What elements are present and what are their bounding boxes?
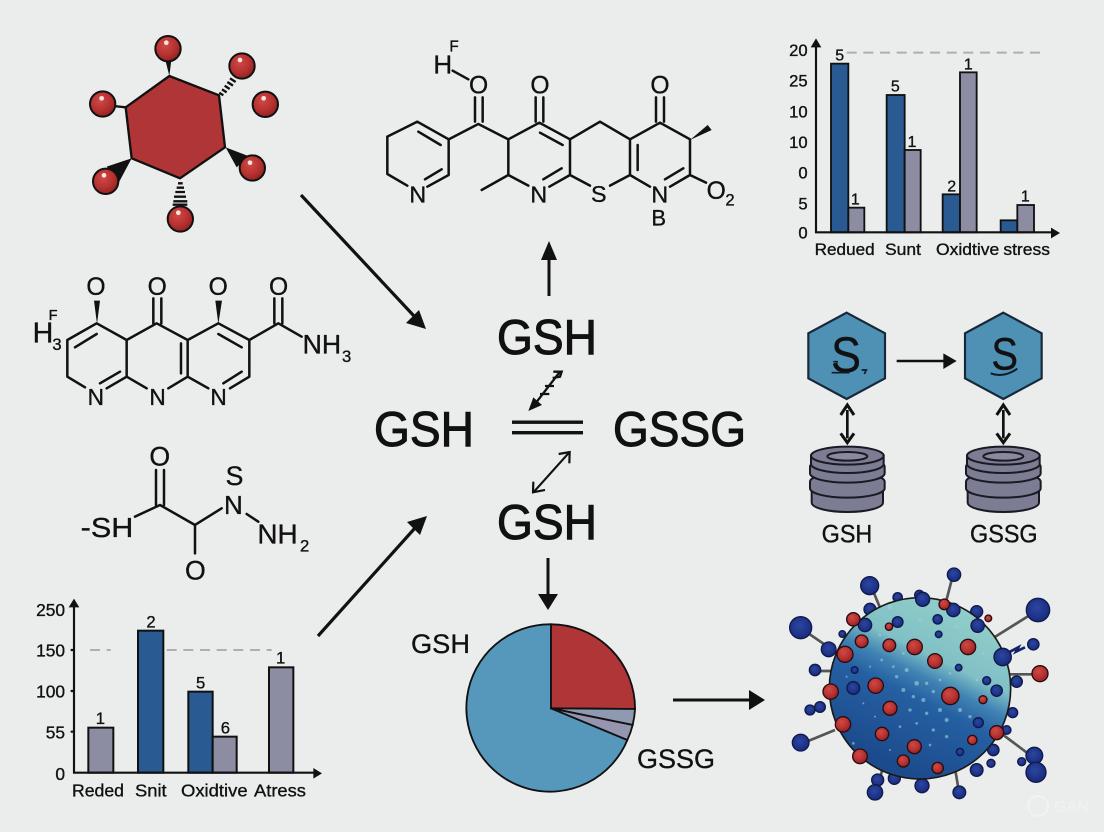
blue balls on sphere and rim	[790, 568, 1050, 800]
linker squiggle	[1010, 647, 1025, 652]
bar chart: top right	[789, 38, 1060, 259]
atom labels: -SH	[81, 512, 133, 543]
hexagon: left S: S	[831, 327, 861, 383]
arrow: hexagon to hexagon	[897, 353, 957, 369]
bonds and wedges	[107, 60, 248, 205]
bar value labels: 1	[96, 709, 105, 728]
arrow: left double	[841, 405, 854, 443]
atom labels: O	[650, 73, 670, 100]
bar value labels: 5	[196, 673, 205, 692]
atom labels: 3	[342, 347, 351, 366]
x axis labels: Reded	[72, 781, 124, 801]
hexagon: left S	[808, 313, 885, 399]
x axis labels: stress	[1003, 240, 1050, 259]
molecule: left fused rings	[33, 274, 351, 410]
hexagon: right S: S	[991, 328, 1018, 379]
bar value labels: 1	[964, 56, 973, 73]
bar value labels: 2	[146, 613, 156, 632]
arrow: pie to sphere	[673, 690, 765, 710]
slice: gray upper	[551, 708, 635, 725]
atom labels: 3	[52, 335, 62, 354]
slice: red	[551, 624, 635, 709]
watermark	[1028, 796, 1089, 816]
atom labels: O	[149, 441, 170, 471]
center label: GSH left: GSH	[374, 403, 474, 457]
x axis labels: Redued	[815, 240, 875, 259]
red balls	[823, 599, 1048, 774]
atom labels	[409, 39, 735, 230]
y axis labels: 0	[798, 224, 808, 243]
atom labels: 2	[300, 537, 309, 556]
atom labels: O	[185, 555, 206, 585]
arrow: double headed thin	[533, 452, 570, 492]
bonds	[387, 71, 706, 190]
x axis labels: Atress	[254, 781, 306, 801]
atom labels	[81, 441, 309, 585]
axes	[69, 599, 322, 779]
y axis labels: 0	[798, 164, 808, 183]
bars	[88, 631, 293, 773]
atom labels: F	[449, 39, 459, 56]
axes	[811, 38, 1060, 238]
watermark: GAN	[1054, 799, 1089, 816]
bar value labels: 5	[835, 48, 844, 65]
molecule: SH amide fragment	[81, 441, 309, 585]
x axis labels	[72, 781, 306, 801]
bar value labels: 1	[908, 134, 917, 151]
stack: right	[966, 447, 1041, 512]
pie label: GSSG: GSSG	[637, 744, 715, 774]
atom labels: NH	[303, 329, 341, 359]
y axis labels: 10	[789, 133, 808, 152]
bar value labels: 2	[947, 179, 956, 196]
atom labels: NH	[257, 518, 298, 549]
slice: gray lower	[551, 708, 633, 740]
label: GSH: GSH	[822, 521, 872, 548]
atom labels: O	[530, 73, 550, 100]
x axis labels: Snit	[135, 781, 167, 801]
bar chart: bottom left	[36, 599, 322, 801]
molecule: red hexagon with atoms	[90, 36, 278, 232]
bars	[831, 64, 1034, 232]
arrow: bar chart to center	[318, 516, 427, 636]
pie label: GSH: GSH	[411, 629, 470, 659]
arrow: hexagon to center	[301, 195, 426, 329]
hexagon pathway with stacks	[808, 313, 1042, 548]
y axis labels: 150	[36, 641, 65, 661]
x axis labels: Oxidtive	[181, 781, 248, 801]
bar value labels: 1	[1021, 189, 1030, 206]
slice: blue GSH	[466, 624, 627, 792]
threshold line	[90, 647, 272, 653]
atom labels: O	[86, 274, 106, 301]
y axis labels: 20	[789, 41, 808, 60]
arrow: small barbed arrow	[528, 372, 562, 411]
label: GSSG: GSSG	[970, 521, 1038, 548]
atom labels: O	[209, 274, 228, 301]
y axis labels: 55	[46, 722, 65, 742]
atom labels: N	[530, 182, 547, 208]
y axis labels	[789, 41, 808, 243]
x axis labels	[815, 240, 1050, 259]
outer balls behind sphere	[821, 590, 1022, 793]
y axis labels: 250	[36, 600, 65, 620]
atom labels: F	[49, 308, 58, 324]
y axis labels: 0	[55, 764, 65, 784]
wedge bond	[690, 125, 712, 140]
atom labels: N	[88, 384, 104, 410]
atom labels: O	[469, 73, 488, 100]
arrow: center down to pie	[538, 558, 558, 610]
wedge bonds	[94, 301, 222, 324]
atom labels: O	[269, 274, 288, 301]
atom labels: N	[224, 490, 243, 520]
molecule: top center structure	[387, 39, 735, 230]
bar value labels: 6	[221, 718, 230, 737]
bar value labels: 1	[851, 191, 860, 208]
atom labels: O	[707, 178, 726, 205]
atom labels: N	[210, 384, 227, 410]
center label: GSH top: GSH	[497, 311, 597, 365]
atom labels: N	[651, 182, 668, 208]
arrow: right double	[997, 405, 1010, 443]
equilibrium bars	[512, 420, 583, 434]
sphere: nanoparticle	[790, 568, 1050, 800]
bar value labels: 5	[891, 79, 900, 96]
bonds	[135, 470, 258, 553]
atom labels: B	[651, 205, 666, 230]
speckles	[846, 604, 985, 751]
bar value labels	[96, 613, 285, 737]
arrow: center up to molecule	[541, 241, 557, 296]
atoms	[90, 36, 278, 232]
atom labels: H	[433, 49, 452, 79]
atom labels	[33, 274, 351, 410]
atom labels: 2	[725, 190, 735, 209]
hexagon ring	[126, 76, 225, 178]
stack: left	[810, 447, 885, 512]
hexagon: right S	[965, 313, 1042, 399]
pie chart	[466, 624, 635, 792]
center label: GSH bottom: GSH	[497, 496, 597, 550]
atom highlights	[99, 40, 266, 215]
atom labels: S	[226, 461, 243, 491]
atom labels: N	[409, 182, 426, 208]
y axis labels: 25	[789, 72, 808, 91]
center label: GSSG: GSSG	[613, 403, 746, 457]
bonds	[67, 298, 302, 388]
y axis labels: 100	[36, 681, 65, 701]
sphere body	[829, 598, 1011, 779]
atom labels: S	[591, 181, 607, 207]
x axis labels: Oxidtive	[936, 240, 999, 259]
y axis labels: 5	[798, 194, 808, 213]
atom labels: N	[149, 384, 166, 410]
atom labels: O	[148, 274, 167, 301]
y axis labels	[36, 600, 65, 784]
spike wires	[807, 580, 1033, 790]
y axis labels: 10	[789, 102, 808, 121]
threshold line	[847, 50, 1042, 56]
bar value labels: 1	[276, 648, 285, 667]
x axis labels: Sunt	[885, 240, 921, 259]
atom labels: H	[33, 318, 53, 350]
bar value labels	[835, 48, 1030, 208]
